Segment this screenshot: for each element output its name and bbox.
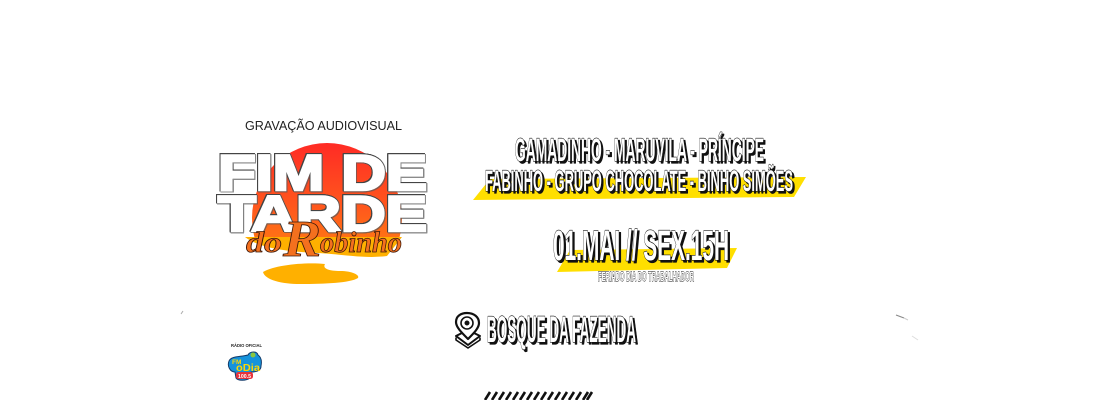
radio logo: 100.5 (238, 374, 251, 380)
logo script: do Robinho: R (282, 211, 321, 268)
panel: line-up (473, 132, 806, 200)
sun (252, 143, 402, 237)
panel: date: 01.MAI // SEX.15H (553, 222, 729, 270)
hatch stripes (485, 392, 592, 400)
logo title line 1: FIM DE (218, 145, 427, 201)
logo title line 2: TARDE (218, 186, 427, 242)
logo script: do Robinho: obinho (320, 226, 402, 259)
label: rádio oficial: RÁDIO OFICIAL (231, 342, 262, 348)
radio logo: FM (232, 359, 241, 366)
logo script: do Robinho: do (246, 226, 282, 259)
panel: line-up: GAMADINHO - MARUVILA - PRÍNCIPE (515, 132, 764, 168)
sunset lower reflection (263, 263, 358, 284)
logo script: do Robinho (246, 211, 402, 268)
sunset reflection (245, 237, 402, 257)
yellow banner (473, 177, 806, 200)
decorative faint marks (181, 311, 918, 340)
panel: date (553, 222, 737, 284)
event logo: Fim de Tarde do Robinho (218, 143, 427, 293)
text: BOSQUE DA FAZENDA (487, 309, 636, 350)
radio sponsor (228, 342, 262, 380)
radio logo: oDia (236, 363, 260, 374)
icon: location pin (456, 313, 480, 348)
radio logo (228, 352, 261, 380)
subtitle: gravação audiovisual: GRAVAÇÃO AUDIOVISUAL (245, 118, 402, 133)
yellow banner (557, 248, 737, 272)
panel: date: FERIADO DIA DO TRABALHADOR (598, 268, 694, 284)
